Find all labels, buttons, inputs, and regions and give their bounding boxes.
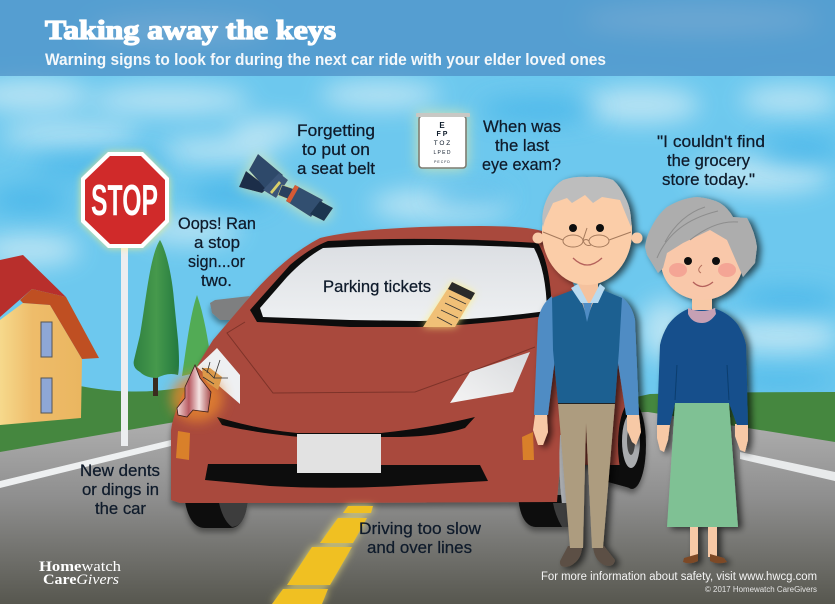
dent and cracked headlight xyxy=(171,360,228,422)
shoes xyxy=(560,546,582,567)
quote xyxy=(657,133,765,189)
neck and collar xyxy=(578,275,598,318)
front right rim xyxy=(559,435,570,505)
ears xyxy=(532,232,544,244)
icon: eye chart: F P xyxy=(437,131,448,138)
label: dents: New dents xyxy=(80,462,160,480)
side mirror xyxy=(210,296,250,320)
hair xyxy=(645,197,757,277)
rear wheel xyxy=(618,401,646,489)
stop sign: STOP xyxy=(91,176,158,225)
belt xyxy=(558,402,615,404)
icon: seat belt xyxy=(239,154,333,221)
car xyxy=(171,226,646,528)
label: driving: and over lines xyxy=(367,539,472,557)
windshield xyxy=(250,239,552,327)
icon: parking ticket xyxy=(423,282,475,327)
logo: Home watch xyxy=(39,559,122,575)
label: stop sign: a stop xyxy=(194,234,240,252)
label: seat belt: to put on xyxy=(302,141,370,159)
label: seat belt xyxy=(297,122,375,178)
glasses xyxy=(543,228,631,247)
label: eye exam xyxy=(482,118,561,174)
label: stop sign: Oops! Ran xyxy=(178,215,256,233)
face xyxy=(661,224,743,300)
icon: eye chart: L P E D xyxy=(434,150,451,156)
eyes xyxy=(569,224,577,232)
footer note: © 2017 Homewatch CareGivers xyxy=(705,585,817,594)
quote: the grocery xyxy=(667,152,751,170)
man xyxy=(532,177,642,567)
mouth xyxy=(693,282,713,286)
header band xyxy=(0,0,835,76)
hair strands xyxy=(657,207,738,258)
trees xyxy=(134,240,211,396)
shirt sleeves xyxy=(534,296,556,415)
hood crease lines xyxy=(227,322,535,393)
ground: grass and road xyxy=(0,380,835,604)
front right wheel xyxy=(518,495,570,527)
footer note: For more information about safety, visit www.hwcg.com xyxy=(541,571,817,583)
road center line xyxy=(272,506,373,604)
icon: eye chart xyxy=(416,113,470,168)
sign post xyxy=(121,247,128,446)
label: eye exam: When was xyxy=(483,118,561,136)
front left wheel xyxy=(184,495,248,528)
quote: store today." xyxy=(662,171,755,189)
stop sign xyxy=(81,152,169,446)
icon: eye chart: E xyxy=(439,121,445,130)
label: seat belt: Forgetting xyxy=(297,122,375,140)
house xyxy=(0,255,99,425)
label: parking tickets: Parking tickets xyxy=(323,278,431,296)
label: seat belt: a seat belt xyxy=(297,160,375,178)
label: stop sign: sign...or xyxy=(188,253,245,271)
lower grille xyxy=(205,464,488,488)
label: stop sign xyxy=(178,215,256,290)
trousers xyxy=(558,403,615,548)
vest xyxy=(552,288,622,403)
eyes xyxy=(684,257,692,265)
right headlight xyxy=(450,352,530,403)
skirt xyxy=(667,403,738,527)
shoes xyxy=(683,554,698,563)
cheeks xyxy=(669,263,687,277)
woman xyxy=(645,197,757,563)
label: dents xyxy=(80,462,160,518)
head xyxy=(542,179,632,285)
label: dents: the car xyxy=(95,500,147,518)
label: dents: or dings in xyxy=(82,481,159,499)
label: eye exam: the last xyxy=(495,137,549,155)
hair xyxy=(542,177,631,227)
label: stop sign: two. xyxy=(201,272,232,290)
label: driving: Driving too slow xyxy=(359,520,481,538)
license plate xyxy=(297,434,381,473)
quote: "I couldn't find xyxy=(657,133,765,151)
left headlight xyxy=(197,348,240,404)
label: eye exam: eye exam? xyxy=(482,156,561,174)
mouth xyxy=(573,258,602,265)
logo: CareGivers xyxy=(43,572,119,588)
title: Taking away the keys xyxy=(45,15,336,45)
legs xyxy=(690,525,698,557)
label: driving xyxy=(359,520,481,557)
sleeve folds xyxy=(675,365,729,400)
hands xyxy=(657,424,670,452)
collar xyxy=(688,308,716,323)
icon: eye chart: T O Z xyxy=(434,140,450,147)
hands xyxy=(533,415,548,445)
body xyxy=(171,226,626,503)
icon: eye chart: P E C F D xyxy=(434,160,450,164)
logo xyxy=(39,559,122,588)
sky background xyxy=(0,0,835,460)
turn signals xyxy=(176,431,190,460)
rear fill xyxy=(600,465,630,488)
subtitle: Warning signs to look for during the next car ride with your elder loved ones xyxy=(45,51,606,69)
sweater xyxy=(657,309,748,425)
footer note xyxy=(541,571,817,594)
nose xyxy=(699,265,702,273)
upper grille xyxy=(217,417,475,437)
neck xyxy=(692,292,712,310)
